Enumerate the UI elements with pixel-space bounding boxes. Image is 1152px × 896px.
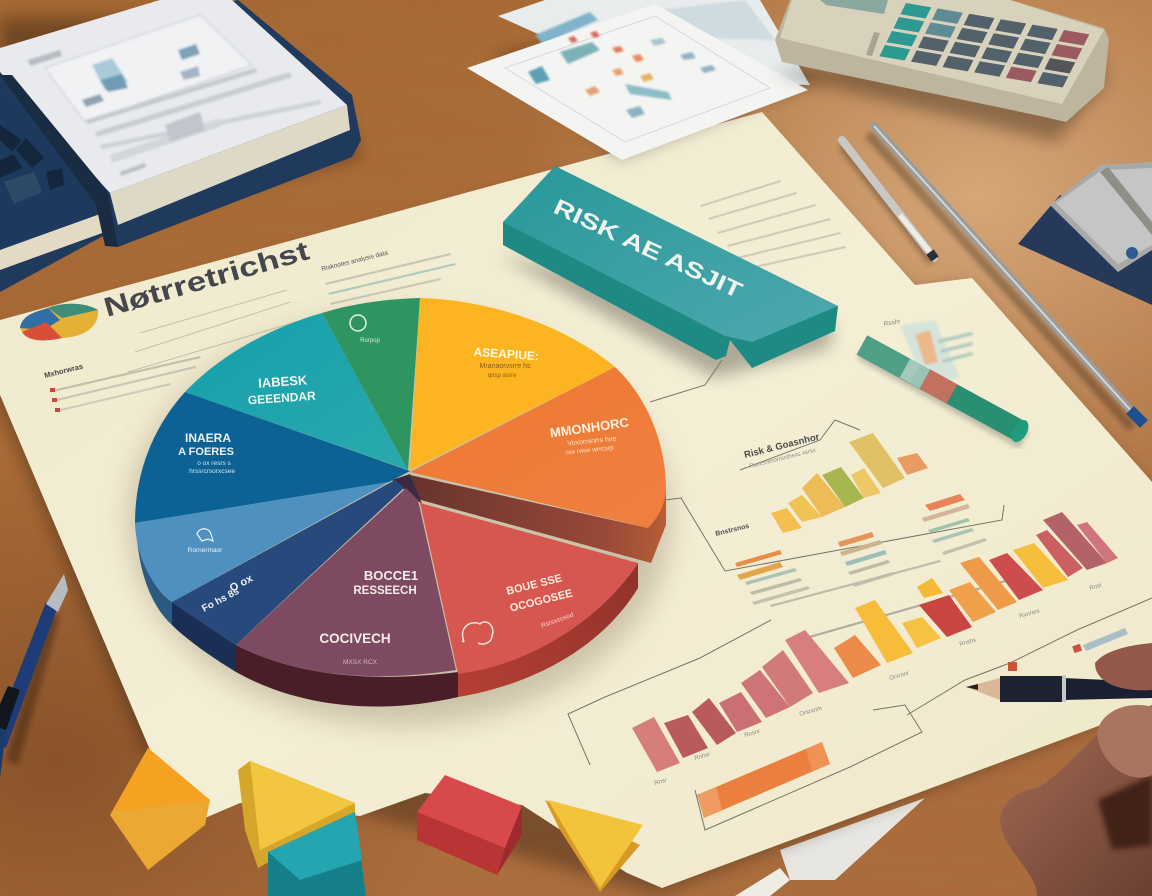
small bar chart: Rsxxsrsnorrsrshsxs xsrsx: [749, 448, 816, 470]
notebook on top left: [0, 0, 361, 292]
slice: teal: GEEENDAR: [247, 389, 316, 407]
paper stack under report: [735, 798, 925, 896]
bar axis labels: Rnsr: [654, 778, 668, 787]
blue pen at lower left: [0, 574, 68, 778]
left side legend text: Mxhorwras: [43, 362, 84, 380]
small bar chart: Risk & Goasnhor: [743, 432, 821, 461]
slice: light blue: [135, 482, 389, 602]
bar axis labels: Rnsr: [1089, 583, 1103, 592]
bar axis labels: Orsrxnm: [799, 706, 823, 718]
notebook page print: [28, 15, 322, 176]
slice: yellow: qnsp asrre: [488, 373, 517, 379]
slice: yellow: Mranaorvsrre hs: [480, 363, 531, 370]
bar axis labels: Rnshx: [959, 637, 977, 648]
slice: navy: O ox: [228, 572, 256, 595]
slice: red: [420, 503, 638, 674]
slice: red: OCOGOSEE: [509, 588, 574, 615]
slice: dark blue: INAERA: [185, 431, 231, 445]
pen: [966, 675, 1152, 702]
slice: navy: Fo hs 8s: [200, 586, 242, 615]
slice: dark blue: [135, 392, 410, 523]
slice: yellow: [410, 298, 615, 470]
legend strips: Bnstrsnos: [715, 523, 750, 538]
slice: orange: [410, 367, 666, 528]
main fist: [1000, 735, 1152, 896]
orange summary bar: [697, 742, 830, 818]
slice: maroon: BOCCE1: [364, 568, 418, 583]
marker pen on report: [862, 318, 1032, 445]
shape: orange pyramid: [110, 748, 210, 870]
shape: teal wedge: [268, 812, 366, 896]
slice: maroon: MXSX RCX: [343, 659, 378, 666]
printed chart behind marker: [900, 320, 973, 385]
marker pen on report: Rsshr: [883, 318, 902, 328]
small bar chart: [715, 432, 987, 605]
large bar chart: [632, 512, 1118, 772]
legend strips: [715, 494, 987, 605]
teal risk assessment block: RISK AE ASJIT: [550, 194, 747, 303]
tablet and clip at right edge: [1018, 162, 1152, 305]
slice: green: Rorpop: [360, 338, 380, 344]
bar axis labels: Rosnr: [744, 729, 761, 739]
index finger: [1097, 705, 1152, 778]
slice: orange: Voxorrsnrrs hve: [567, 435, 617, 448]
slice: green: [322, 298, 420, 470]
slice: navy: [172, 480, 404, 645]
shape: yellow wedge: [238, 761, 355, 868]
bars: [771, 433, 928, 533]
keyboard at left edge: [0, 75, 118, 270]
bar axis labels: [654, 583, 1103, 787]
slice: maroon: COCIVECH: [319, 631, 391, 646]
slice: red: Rsrsxsosod: [540, 611, 575, 630]
shape: red cube: [417, 775, 522, 875]
left side legend text: [43, 356, 201, 412]
pie chart: [130, 298, 670, 725]
slice: teal: [185, 313, 408, 470]
pie hub shadow: [392, 474, 422, 504]
top chart notes: [321, 180, 846, 305]
slice: dark blue: A FOERES: [178, 446, 234, 458]
header rule lines: [128, 290, 296, 372]
slice: teal: IABESK: [258, 372, 308, 391]
top documents with charts: [467, 0, 820, 160]
slice: orange: rex rwve wrrcsrp: [566, 444, 614, 456]
slice: dark blue: o ox resrs s: [197, 460, 232, 467]
orange pie slice side wall: [410, 475, 666, 563]
title heading: Nøtrretrichst: [100, 235, 312, 323]
mechanical pencils top right: [842, 126, 1144, 428]
bar axis labels: Rxnrsrs: [1019, 608, 1040, 620]
wide caption under small chart: [770, 560, 1006, 642]
slice: maroon: RESSEECH: [353, 585, 417, 597]
connector lines: [568, 360, 1152, 830]
slice: yellow: ASEAPIUE:: [473, 345, 539, 363]
slice: maroon: [236, 488, 456, 676]
bar axis labels: Rnhsr: [694, 752, 711, 762]
calculator: [771, 0, 1109, 142]
pie wall lower: [236, 645, 458, 707]
bar axis labels: Orxrsnr: [889, 671, 910, 682]
geometric shapes at bottom left: [110, 748, 643, 896]
logo mini pie: [20, 304, 98, 340]
teal risk assessment block: [499, 166, 838, 378]
slice: light blue: Rornermaor: [188, 547, 223, 554]
dark hand interior: [1098, 775, 1152, 850]
top chart notes: Risknotes analysis data: [321, 250, 389, 273]
shape: yellow triangle: [545, 800, 643, 892]
upper finger: [1095, 643, 1152, 690]
slice: dark blue: hrssrcrsorxcsee: [189, 468, 235, 475]
hand and pen: [966, 643, 1152, 896]
slice: orange: MMONHORC: [549, 415, 630, 440]
calculator keys: [879, 3, 1089, 88]
slice: red: BOUE SSE: [505, 572, 563, 598]
small tag near pen: [1008, 628, 1128, 671]
